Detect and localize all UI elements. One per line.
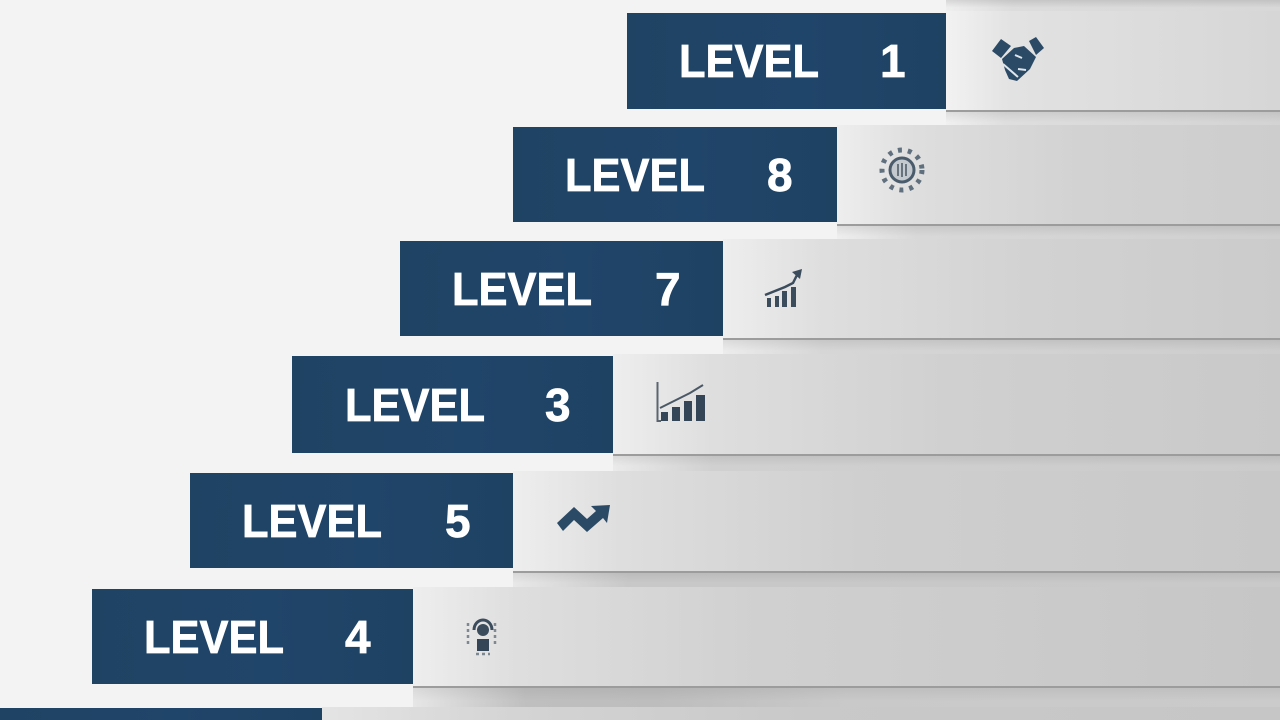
level 1 row (627, 11, 1280, 125)
level 1 tab: LEVEL (679, 35, 819, 87)
level 7 row (400, 239, 1280, 354)
level 5 tab: 5 (445, 495, 471, 547)
level 7 tab (400, 241, 723, 336)
icon: growth chart (656, 382, 705, 422)
level 7 shadow band (723, 339, 1280, 356)
icon: handshake (992, 37, 1044, 81)
level 4 tab: 4 (345, 611, 371, 663)
level 4 shadow band (413, 687, 1280, 707)
icon: rising bars (764, 269, 802, 307)
level 3 row (292, 354, 1280, 471)
top edge strip (946, 0, 1280, 11)
icon: zigzag arrow (557, 505, 610, 532)
level 3 tab: 3 (545, 379, 571, 431)
level 1 shadow band (946, 111, 1280, 127)
level 4 tab (92, 589, 413, 684)
level 5 tab (190, 473, 513, 568)
level 1 bar (946, 11, 1280, 112)
level 3 tab (292, 356, 613, 453)
bottom row (0, 707, 1280, 720)
level 8 bar (837, 125, 1280, 226)
level 8 tab (513, 127, 837, 222)
level 8 tab: LEVEL (565, 149, 705, 201)
level 5 tab: LEVEL (242, 495, 382, 547)
bottom bar (322, 707, 1280, 720)
level 7 tab: LEVEL (452, 263, 592, 315)
level 3 tab: LEVEL (345, 379, 485, 431)
level 8 row (513, 125, 1280, 239)
level 5 row (190, 471, 1280, 587)
level 3 bar (613, 354, 1280, 456)
icon: head profile (466, 618, 496, 656)
level 8 tab: 8 (767, 149, 793, 201)
level 5 shadow band (513, 571, 1280, 588)
level 1 tab (627, 13, 946, 109)
level 8 shadow band (837, 225, 1280, 241)
level 7 tab: 7 (655, 263, 681, 315)
level 4 tab: LEVEL (144, 611, 284, 663)
level 3 shadow band (613, 454, 1280, 471)
level 7 bar (723, 239, 1280, 340)
level 1 tab: 1 (880, 35, 906, 87)
bottom tab (0, 708, 322, 720)
level 4 bar (413, 587, 1280, 688)
icon: gear circle (880, 148, 924, 192)
level 4 row (92, 587, 1280, 707)
level 5 bar (513, 471, 1280, 573)
